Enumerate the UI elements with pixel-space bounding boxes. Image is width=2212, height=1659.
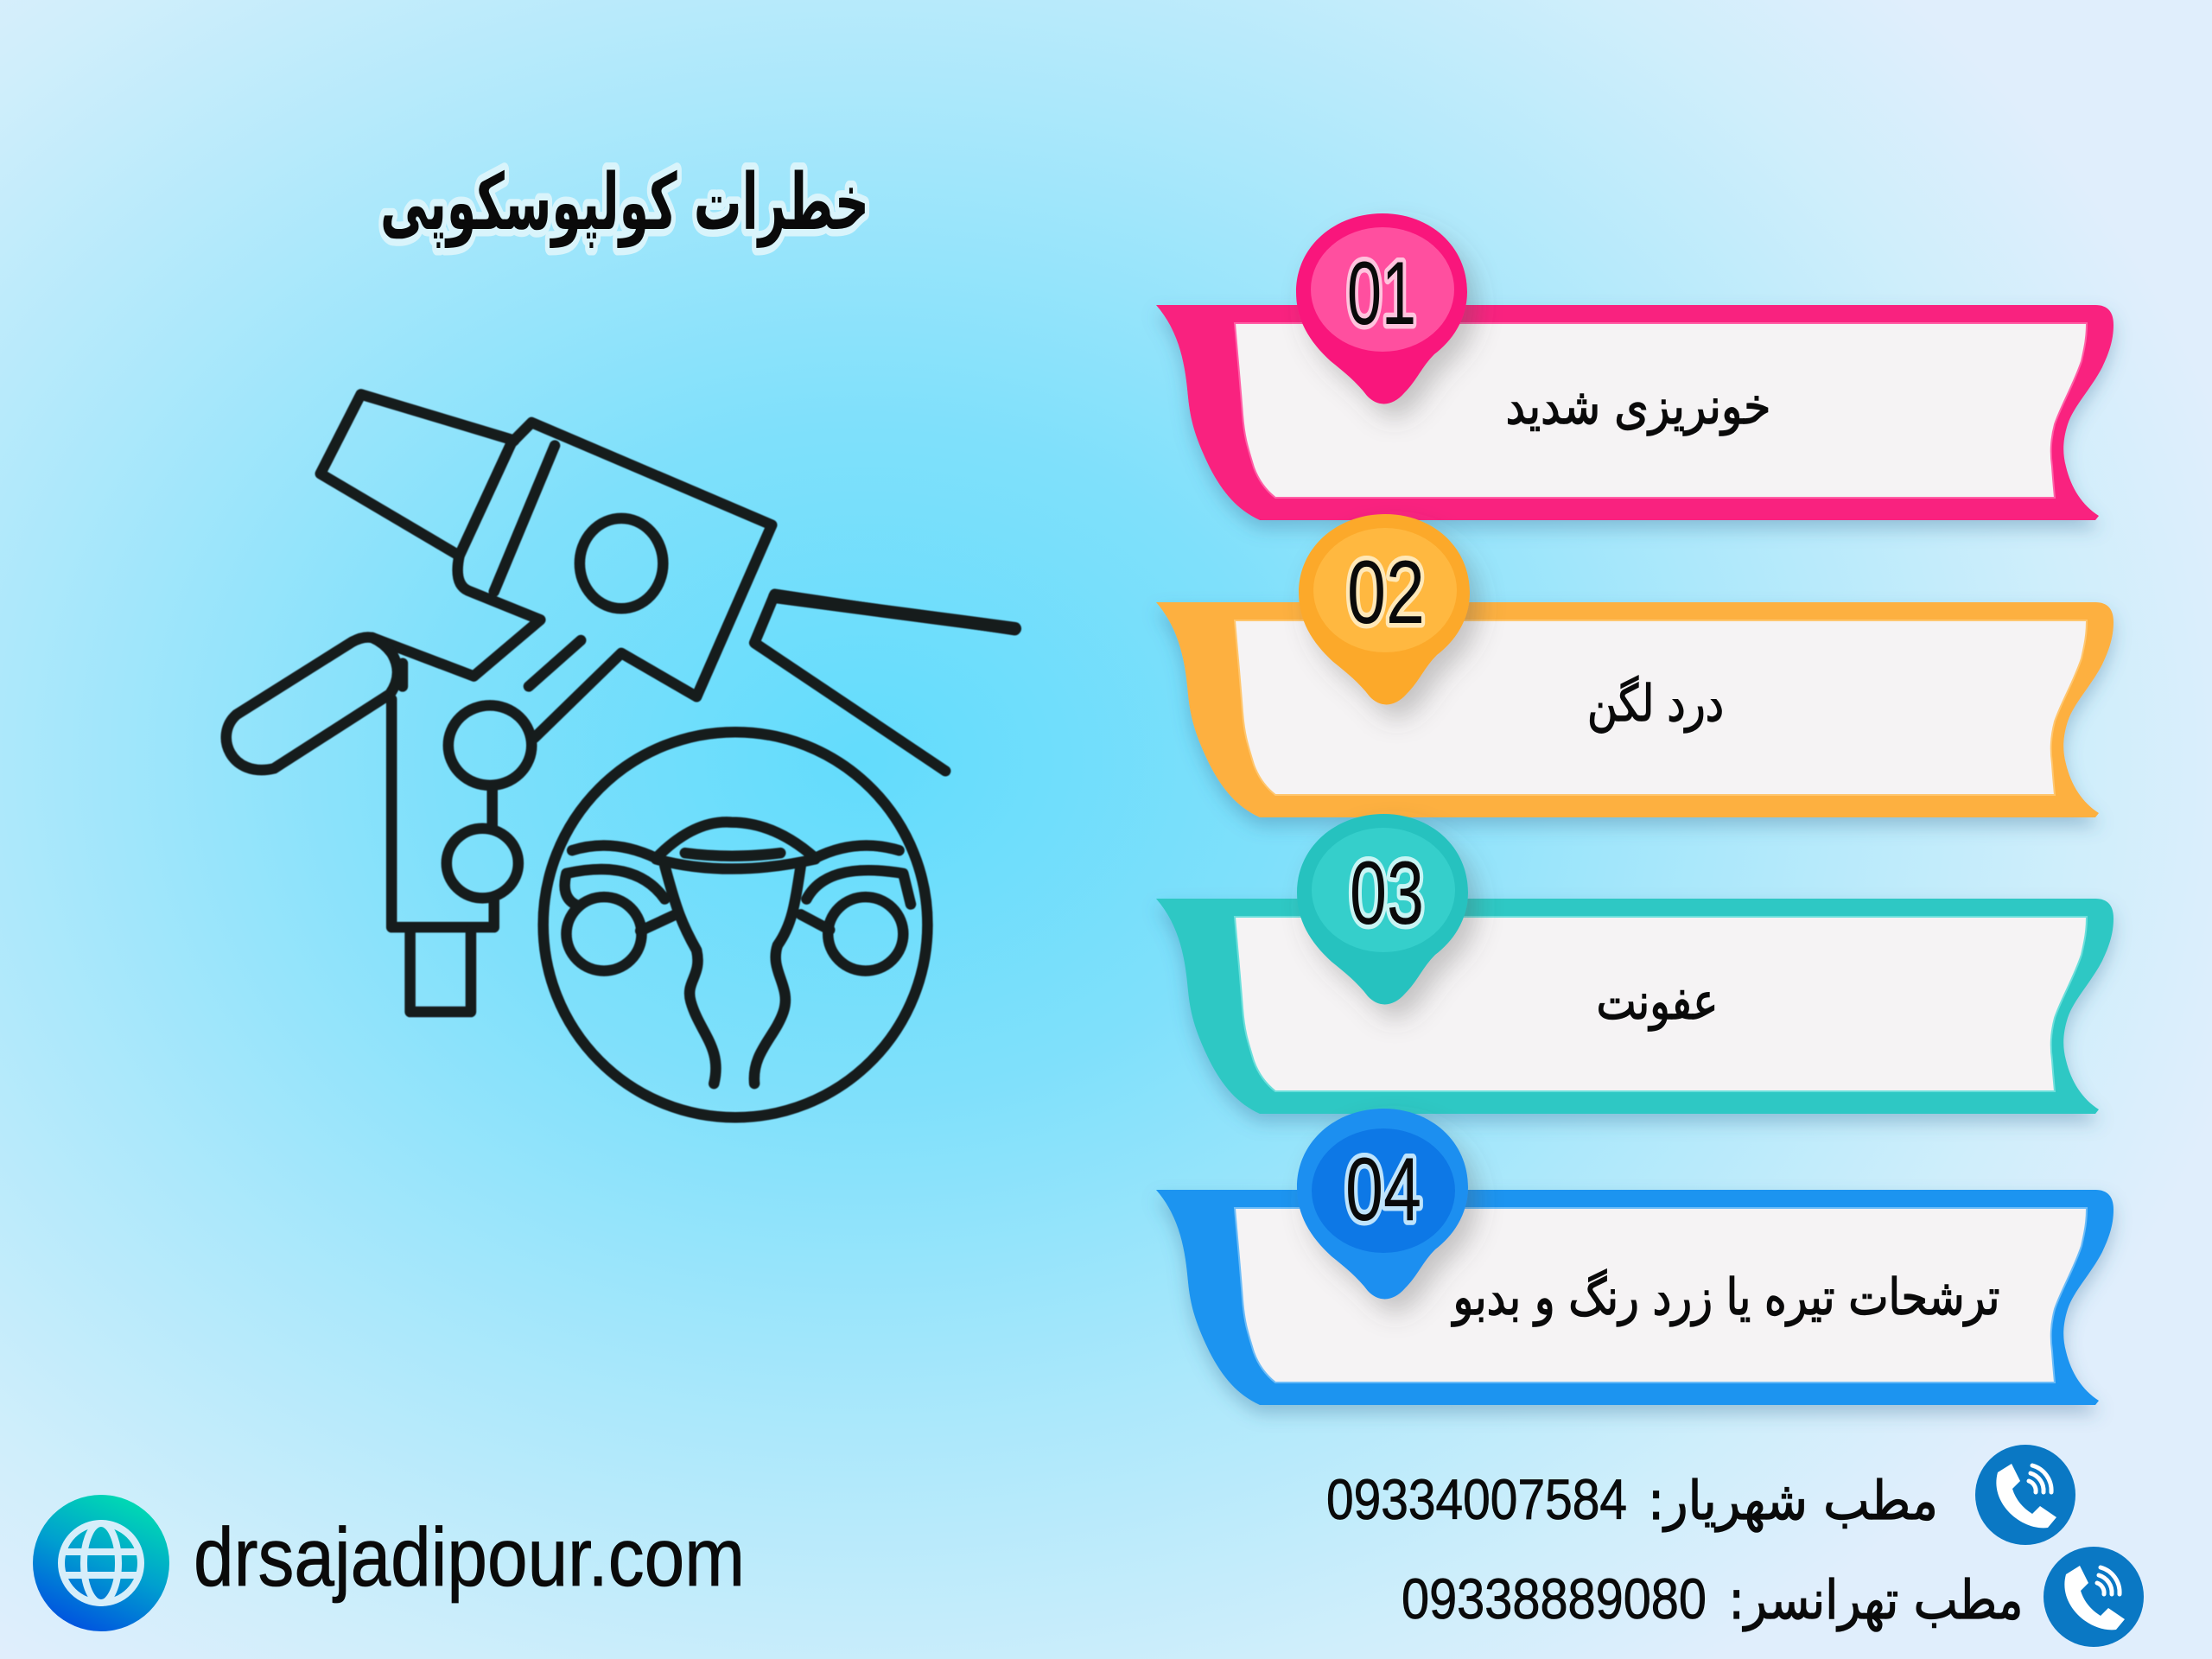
card 04 number: 04: [1345, 1140, 1421, 1240]
phone number: 09338889080: [1402, 1567, 1707, 1630]
icon: globe: [33, 1495, 169, 1631]
card 02 inner panel: [1235, 620, 2087, 795]
joints: [448, 705, 531, 785]
label: مطب تهرانسر:: [1728, 1568, 2024, 1632]
card 01 frame: [1156, 305, 2113, 520]
card 03 number: 03: [1350, 843, 1424, 944]
stand: [391, 664, 494, 927]
website address: drsajadipour.com: [194, 1511, 745, 1604]
contact: Tehransar office: [1402, 1547, 2144, 1647]
icon: colposcope and uterus: [226, 394, 1015, 1117]
contact: Shahriar office: [1326, 1445, 2075, 1545]
stem: [410, 930, 471, 1012]
phone number: 09334007584: [1326, 1467, 1627, 1531]
eyepiece: [321, 394, 514, 556]
card 03 text: عفونت: [1597, 972, 1718, 1032]
icon: phone: [2044, 1547, 2144, 1647]
panel: card 04: [1156, 1109, 2113, 1405]
panel: card 03: [1156, 814, 2113, 1114]
icon: phone: [1975, 1445, 2075, 1545]
card 04 inner panel: [1235, 1208, 2087, 1382]
lens ring: [580, 518, 663, 608]
card 03 pin: [1297, 814, 1468, 1004]
card 02 pin: [1299, 514, 1470, 704]
card 04 pin: [1297, 1109, 1468, 1299]
panel: card 02: [1156, 514, 2113, 817]
label: مطب شهریار:: [1648, 1469, 1938, 1533]
card 01 inner panel: [1235, 323, 2087, 498]
title: خطرات کولپوسکوپی: [380, 157, 869, 248]
card 04 frame: [1156, 1190, 2113, 1405]
card 01 pin: [1296, 213, 1467, 404]
card 03 inner panel: [1235, 917, 2087, 1091]
card 01 number: 01: [1347, 244, 1416, 344]
panel: card 01: [1156, 213, 2113, 520]
slash: [529, 640, 581, 686]
card 01 text: خونریزی شدید: [1505, 377, 1771, 436]
card 02 text: درد لگن: [1587, 674, 1724, 734]
circle frame: [543, 732, 927, 1117]
speculum: [754, 594, 1015, 771]
uterus: [572, 822, 899, 858]
card 02 frame: [1156, 602, 2113, 817]
card 02 number: 02: [1347, 543, 1425, 643]
card 04 text: ترشحات تیره یا زرد رنگ و بدبو: [1451, 1268, 1999, 1327]
body outline: [372, 443, 540, 677]
card 03 frame: [1156, 899, 2113, 1114]
